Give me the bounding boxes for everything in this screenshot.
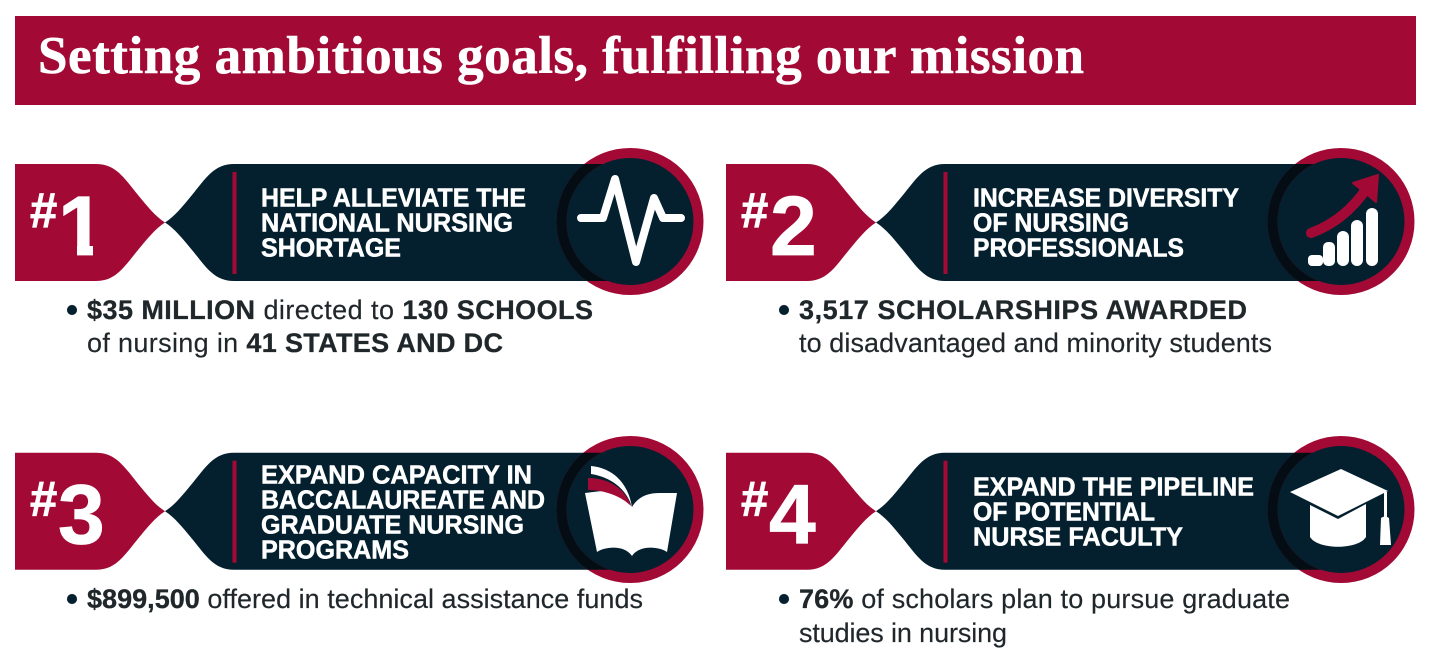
goal 2 detail: to disadvantaged and minority students	[799, 328, 1272, 358]
icon: open book	[562, 441, 698, 578]
panel: goal 2	[726, 153, 1410, 358]
divider 2	[944, 172, 948, 274]
number badge 4: 4	[769, 468, 816, 562]
dark band 1	[165, 164, 630, 281]
goal 1 detail: $35 MILLION directed to 130 SCHOOLS	[87, 295, 593, 325]
icon: growth chart with arrow	[1272, 153, 1410, 290]
title: Setting ambitious goals, fulfilling our mission	[38, 27, 1084, 85]
goal 2 heading: OF NURSING	[973, 210, 1129, 238]
dark band 4	[876, 453, 1341, 570]
goal 2 heading: PROFESSIONALS	[973, 234, 1184, 262]
goal 2 detail: 3,517 SCHOLARSHIPS AWARDED	[799, 295, 1247, 325]
goal 1 heading: HELP ALLEVIATE THE	[261, 184, 526, 212]
goal 2 heading	[973, 184, 1239, 262]
dark band 3	[165, 453, 630, 570]
goal 4 heading: NURSE FACULTY	[973, 524, 1183, 552]
number badge 3	[15, 453, 165, 570]
goal 1 heading	[261, 184, 526, 262]
goal 4 heading	[973, 474, 1254, 552]
goal 1 heading: SHORTAGE	[261, 234, 401, 262]
number badge 3: #	[30, 472, 57, 526]
goal 2 heading: INCREASE DIVERSITY	[973, 184, 1239, 212]
goal 3 detail: $899,500 offered in technical assistance funds	[87, 584, 643, 614]
goal 3 heading: GRADUATE NURSING	[261, 512, 524, 540]
number badge 2: #	[741, 184, 768, 238]
title banner	[15, 16, 1416, 105]
number badge 1: 1	[58, 179, 105, 273]
goal 1 heading: NATIONAL NURSING	[261, 210, 513, 238]
goal 3 heading	[261, 462, 545, 564]
goal 3 heading: PROGRAMS	[261, 536, 409, 564]
number badge 1	[15, 164, 165, 281]
goal 3 heading: EXPAND CAPACITY IN	[261, 462, 532, 490]
dark band 2	[876, 164, 1341, 281]
number badge 4	[726, 453, 876, 570]
divider 1	[232, 172, 236, 274]
number badge 4: #	[741, 472, 768, 526]
goal 1 detail: of nursing in 41 STATES AND DC	[87, 328, 503, 358]
number badge 2: 2	[770, 179, 817, 273]
goal 4 detail: studies in nursing	[799, 618, 1007, 648]
goal 1 detail	[67, 295, 593, 358]
goal 2 detail	[779, 295, 1272, 358]
goal 3 heading: BACCALAUREATE AND	[261, 486, 545, 514]
panel: goal 3	[15, 441, 698, 614]
goal 4 detail	[779, 584, 1290, 648]
panel: goal 1	[15, 153, 698, 358]
icon: heartbeat pulse	[562, 153, 698, 290]
panel: goal 4	[726, 441, 1410, 648]
goal 4 heading: EXPAND THE PIPELINE	[973, 474, 1254, 502]
number badge 2	[726, 164, 876, 281]
goal 4 detail: 76% of scholars plan to pursue graduate	[799, 584, 1290, 614]
icon: graduation cap	[1272, 441, 1410, 578]
number badge 1: #	[30, 184, 57, 238]
divider 4	[944, 461, 948, 563]
goal 4 heading: OF POTENTIAL	[973, 498, 1155, 526]
number badge 3: 3	[58, 468, 105, 562]
divider 3	[232, 461, 236, 563]
